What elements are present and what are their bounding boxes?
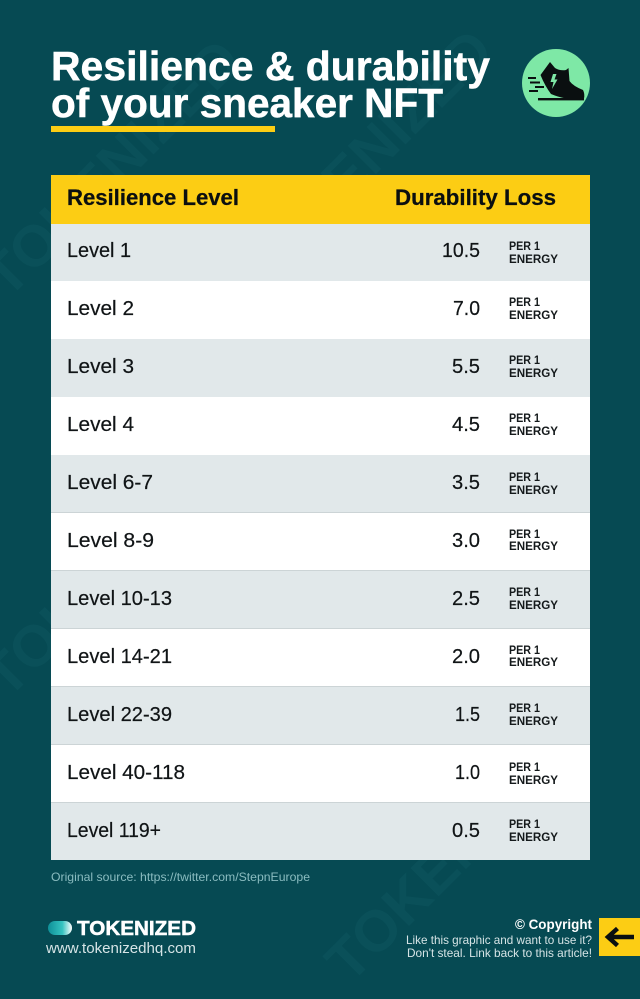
per 1 energy units: ENERGY [509, 539, 558, 553]
level labels: Level 22-39 [67, 704, 172, 726]
text: TOKENIZED [223, 17, 505, 299]
title: of your sneaker NFT [51, 80, 443, 126]
per 1 energy units: ENERGY [509, 655, 558, 669]
level labels: Level 4 [67, 414, 134, 436]
per 1 energy units: PER 1 [509, 817, 540, 831]
per 1 energy units: ENERGY [509, 483, 558, 497]
per 1 energy units: ENERGY [509, 366, 558, 380]
level labels: Level 6-7 [67, 472, 153, 494]
level labels: Level 2 [67, 298, 134, 320]
durability loss values: 1.5 [455, 704, 480, 726]
copyright notice: Don't steal. Link back to this article! [407, 946, 592, 960]
per 1 energy units: PER 1 [509, 527, 540, 541]
per 1 energy units: ENERGY [509, 252, 558, 266]
durability loss values: 7.0 [453, 298, 480, 320]
brand logo: TOKENIZED [77, 918, 196, 940]
durability loss values: 5.5 [452, 356, 480, 378]
per 1 energy units: ENERGY [509, 773, 558, 787]
per 1 energy units: ENERGY [509, 714, 558, 728]
table row backgrounds [51, 224, 590, 860]
per 1 energy units: PER 1 [509, 760, 540, 774]
per 1 energy units: PER 1 [509, 585, 540, 599]
text: TOKENIZED [313, 712, 595, 994]
copyright notice [406, 917, 592, 960]
level labels: Level 10-13 [67, 588, 172, 610]
durability loss values: 3.0 [452, 530, 480, 552]
title underline [51, 126, 275, 132]
per 1 energy units: ENERGY [509, 308, 558, 322]
durability loss values: 1.0 [455, 762, 480, 784]
level labels: Level 40-118 [67, 762, 185, 784]
per 1 energy units: PER 1 [509, 239, 540, 253]
per 1 energy units: PER 1 [509, 701, 540, 715]
title: Resilience & durability [51, 43, 490, 89]
level labels: Level 3 [67, 356, 134, 378]
per 1 energy units: PER 1 [509, 295, 540, 309]
per 1 energy units: ENERGY [509, 830, 558, 844]
durability loss values: 10.5 [442, 240, 480, 262]
panel: resilience table [51, 175, 590, 860]
level labels: Level 8-9 [67, 530, 154, 552]
per 1 energy units: PER 1 [509, 353, 540, 367]
level labels: Level 14-21 [67, 646, 172, 668]
title [51, 43, 490, 126]
table header [51, 175, 590, 224]
copyright notice: © Copyright [515, 917, 592, 932]
level labels: Level 119+ [67, 820, 161, 842]
table header: Durability Loss [395, 185, 556, 210]
per 1 energy units: PER 1 [509, 643, 540, 657]
per 1 energy units: ENERGY [509, 424, 558, 438]
icon: running sneaker [522, 49, 590, 117]
durability loss values: 3.5 [452, 472, 480, 494]
durability loss values: 4.5 [452, 414, 480, 436]
durability loss values: 2.5 [452, 588, 480, 610]
per 1 energy units: PER 1 [509, 470, 540, 484]
icon: back arrow [599, 918, 640, 956]
website url: www.tokenizedhq.com [45, 940, 196, 957]
table header: Resilience Level [67, 185, 239, 210]
durability loss values: 2.0 [452, 646, 480, 668]
per 1 energy units: ENERGY [509, 598, 558, 612]
level labels: Level 1 [67, 240, 131, 262]
copyright notice: Like this graphic and want to use it? [406, 933, 592, 947]
per 1 energy units: PER 1 [509, 411, 540, 425]
level labels [67, 240, 185, 842]
durability loss values: 0.5 [452, 820, 480, 842]
source note: Original source: https://twitter.com/StepnEurope [51, 870, 310, 884]
durability loss values [442, 240, 480, 842]
per 1 energy units [509, 239, 558, 844]
